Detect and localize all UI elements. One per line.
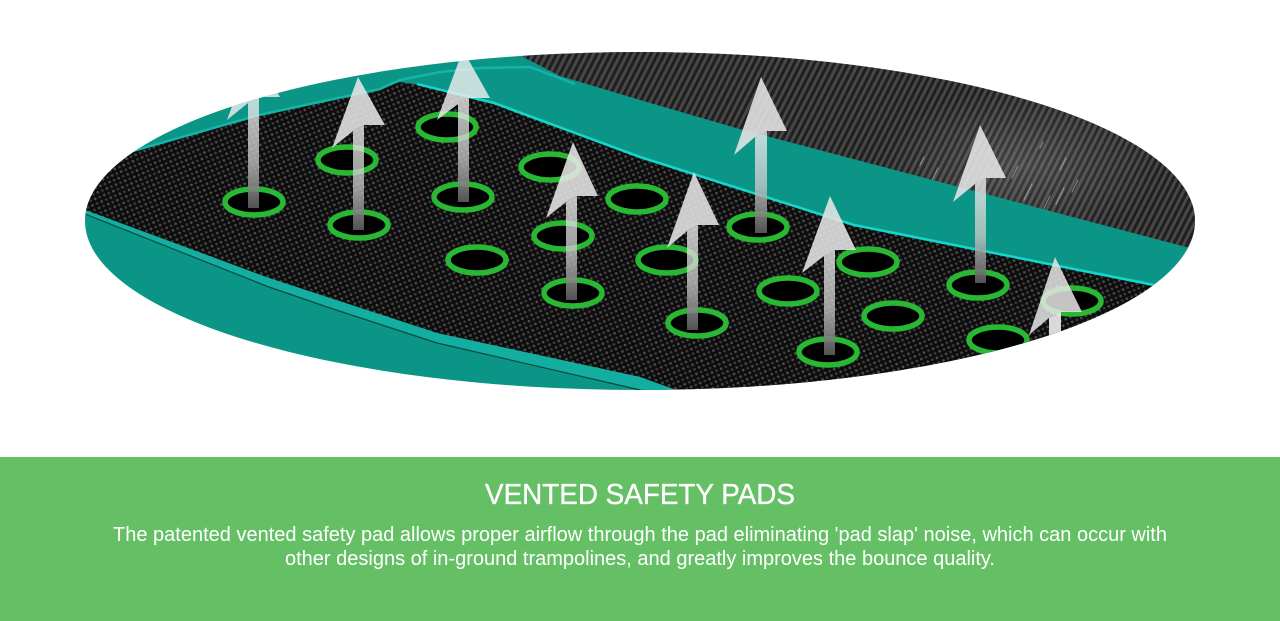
arrow 2 bbox=[332, 77, 385, 230]
mesh: perforated pad surface bbox=[80, 82, 1200, 395]
heading: VENTED SAFETY PADS bbox=[485, 479, 795, 511]
arrow 6 bbox=[734, 77, 787, 233]
cyan edge line along the pad seam bbox=[417, 84, 1200, 296]
stripes: dark outer mat bbox=[523, 50, 1200, 252]
air vent rings bbox=[225, 114, 1101, 365]
photo: vented safety pad in oval crop bbox=[80, 49, 1200, 395]
highlights: sheen on the outer mat bbox=[914, 108, 1127, 216]
arrow 5 bbox=[667, 172, 719, 330]
description text: other designs of in-ground trampolines, and greatly improves the bounce quality. bbox=[285, 548, 995, 570]
panel: green caption band bbox=[0, 457, 1280, 621]
description text: The patented vented safety pad allows proper airflow through the pad eliminating 'pad slap' noise, which can occur with bbox=[113, 524, 1167, 546]
dark seam line along the lower edge bbox=[85, 214, 640, 390]
arrow 3 bbox=[437, 50, 490, 202]
arrow 8 bbox=[953, 125, 1006, 283]
teal pad base bbox=[80, 50, 1200, 395]
arrow 1 bbox=[227, 93, 280, 208]
arrow 4 bbox=[546, 142, 598, 300]
arrow 9 bbox=[1029, 257, 1082, 336]
lighter teal band along the upper-left edge bbox=[126, 67, 575, 153]
description text bbox=[113, 524, 1167, 570]
lighter teal band along the lower edge bbox=[85, 210, 690, 395]
arrow 7 bbox=[802, 196, 856, 355]
